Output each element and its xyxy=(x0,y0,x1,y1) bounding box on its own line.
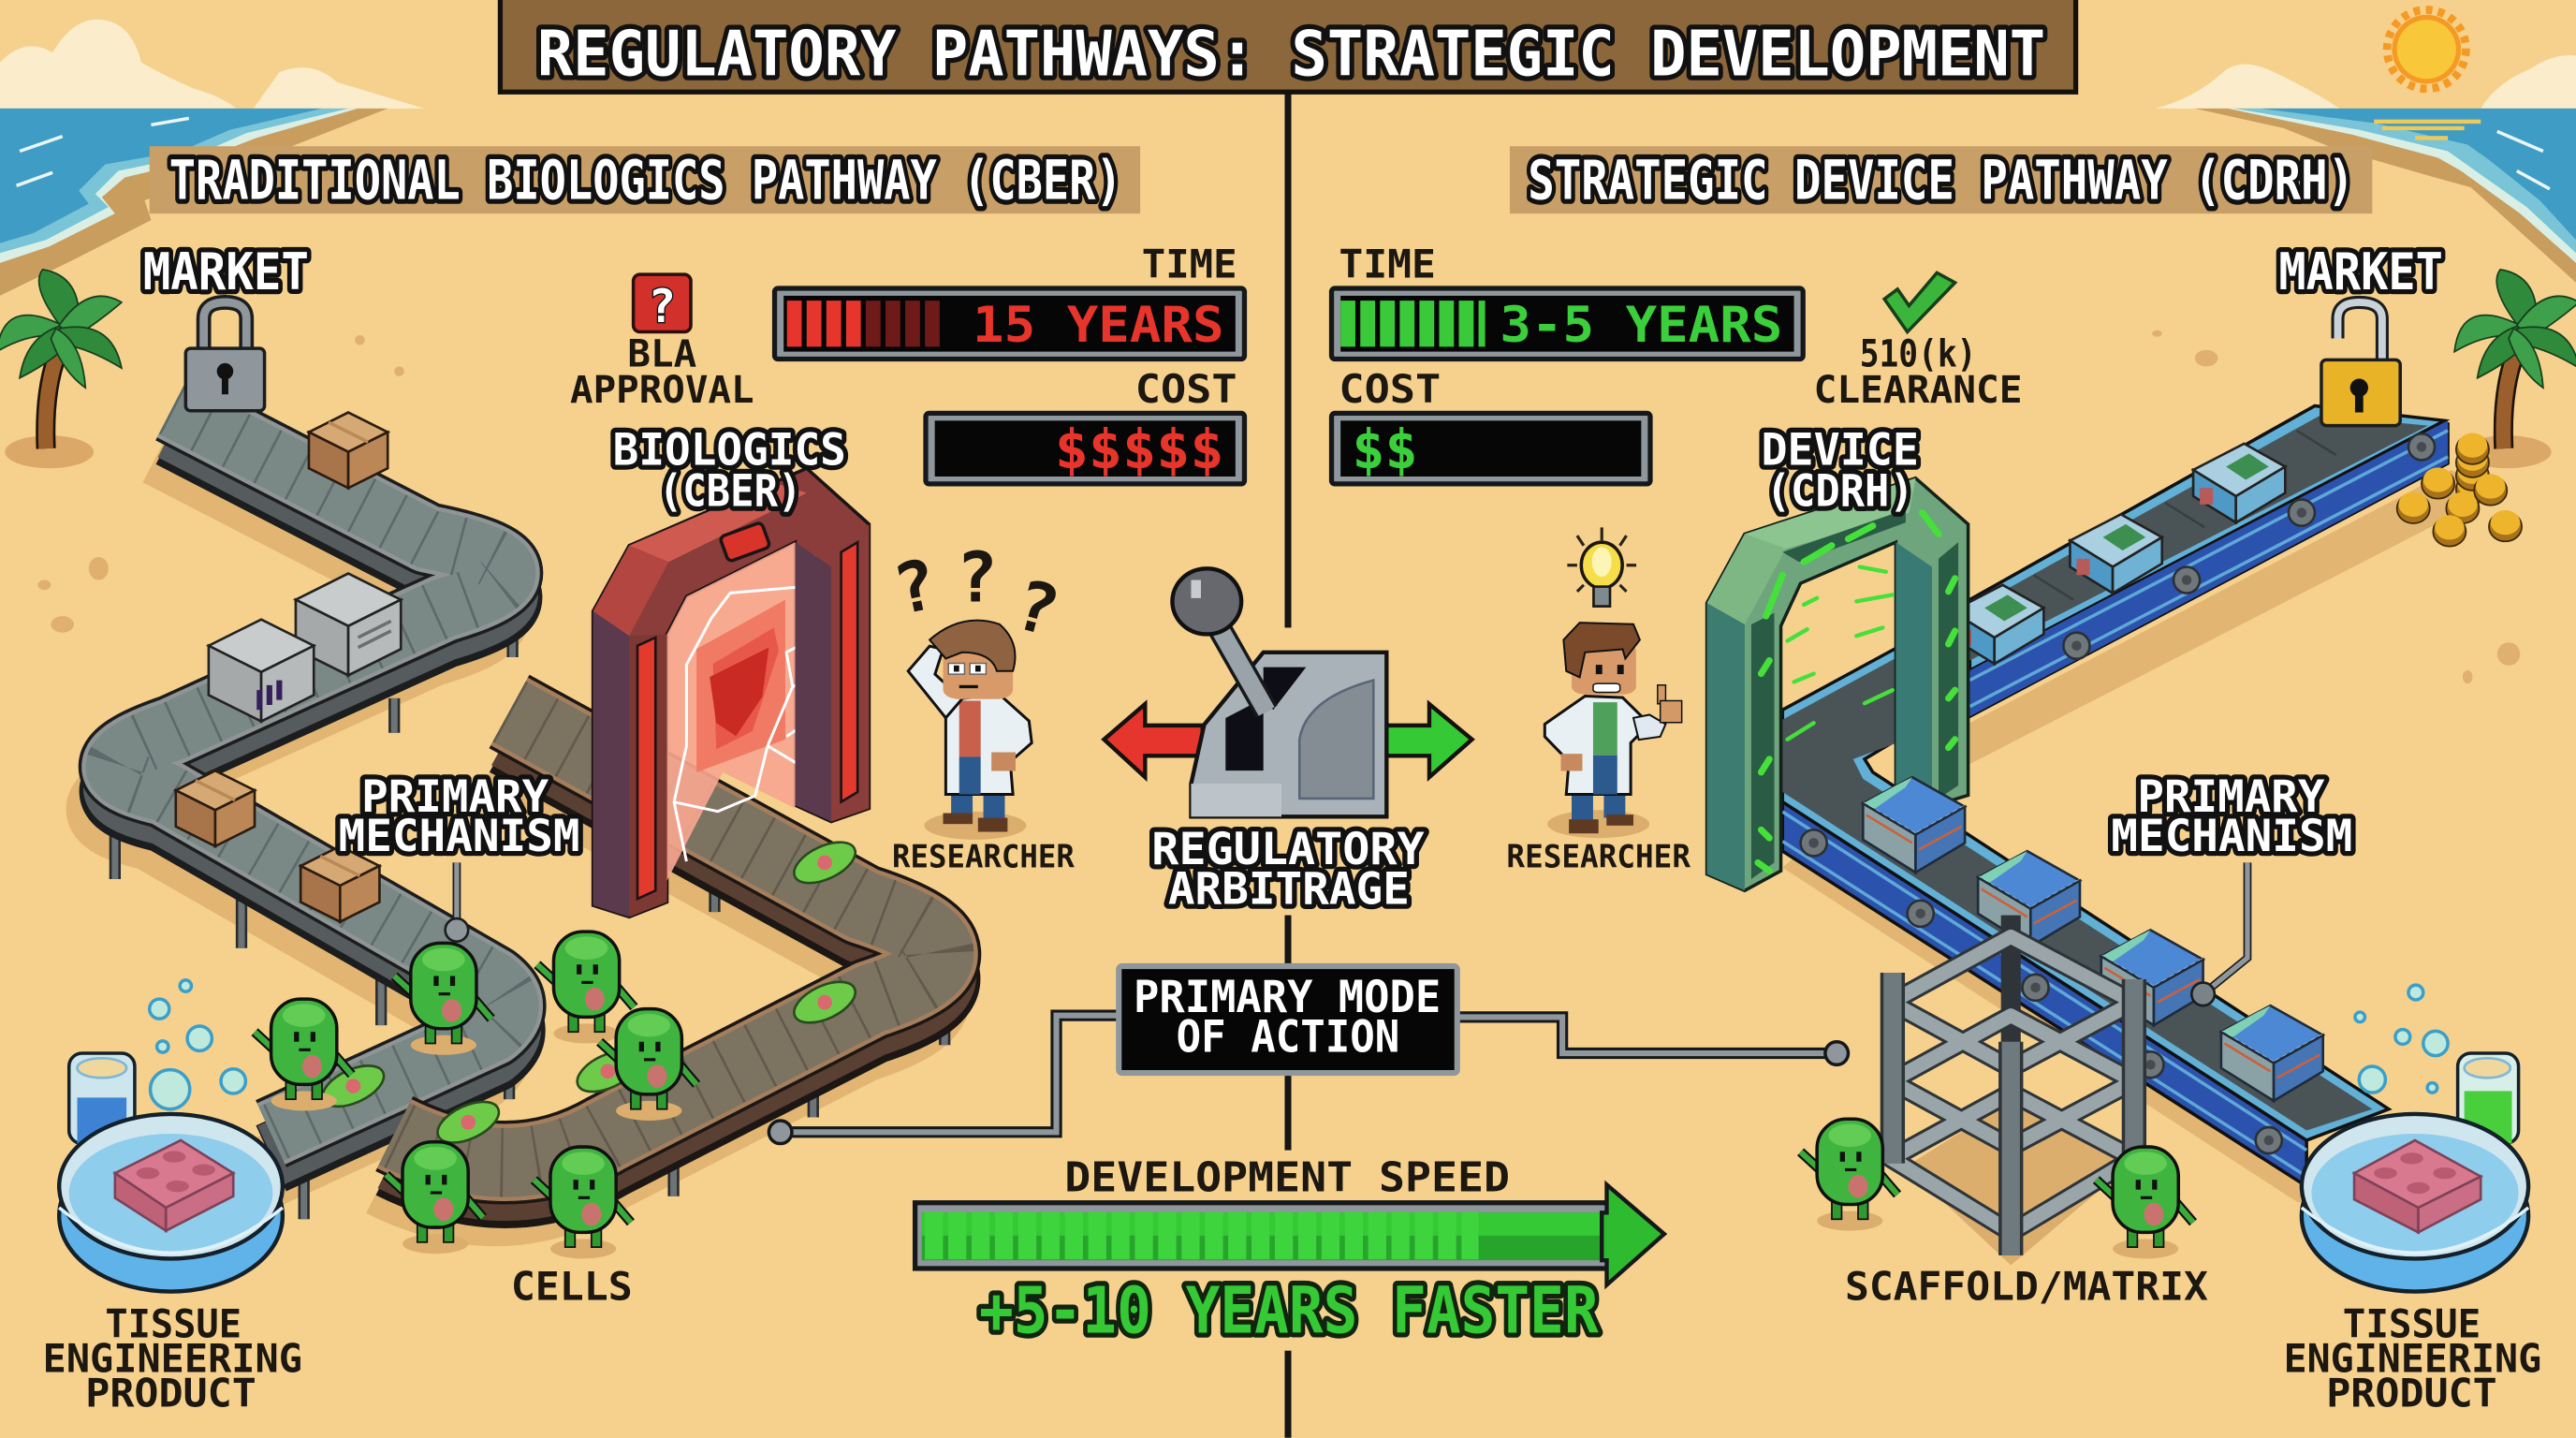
cost meter right: COST xyxy=(1339,366,1441,412)
cost meter left xyxy=(926,366,1244,484)
label: regulatory arbitrage: REGULATORY xyxy=(1151,824,1425,875)
red portal field xyxy=(667,542,817,881)
label: primary mechanism right xyxy=(2111,771,2352,862)
label: BLA approval xyxy=(570,331,754,412)
label: tissue product right xyxy=(2284,1301,2541,1416)
primary mode of action box: OF ACTION xyxy=(1177,1011,1399,1063)
label: researcher left: RESEARCHER xyxy=(892,839,1075,876)
bubbles xyxy=(150,980,245,1109)
label: tissue product right: ENGINEERING xyxy=(2284,1336,2541,1382)
label: cells: CELLS xyxy=(511,1263,633,1309)
label: primary mechanism right: MECHANISM xyxy=(2111,811,2352,862)
researcher confused xyxy=(908,621,1032,840)
belt rollers xyxy=(2063,433,2435,659)
blue conveyor belt upper xyxy=(1969,406,2497,764)
label: 510k clearance: CLEARANCE xyxy=(1814,368,2023,412)
market lock open xyxy=(2321,302,2400,426)
label: device gate xyxy=(1761,425,1919,518)
connector primary mechanism left xyxy=(446,862,468,942)
tissue block xyxy=(2354,1140,2481,1232)
primary mode of action box: PRIMARY MODE xyxy=(1134,972,1441,1023)
cells group right xyxy=(1801,1119,2193,1258)
label: tissue product left: PRODUCT xyxy=(85,1370,256,1416)
label: tissue product right: TISSUE xyxy=(2343,1301,2481,1347)
time meter left xyxy=(775,242,1244,359)
label: researcher right: RESEARCHER xyxy=(1506,839,1690,876)
icon: checkmark xyxy=(1884,272,1955,332)
label: BLA approval: BLA xyxy=(627,331,696,375)
right beach: ocean, clouds and sun xyxy=(2156,10,2576,283)
lever switch xyxy=(1104,568,1472,816)
connector mode of action left xyxy=(768,1016,1120,1144)
label: device gate: (CDRH) xyxy=(1766,466,1914,518)
callout: years faster: +5-10 YEARS FASTER xyxy=(979,1273,1599,1348)
cost meter right xyxy=(1332,366,1650,484)
question marks: ? xyxy=(1006,565,1067,653)
arrow: red left xyxy=(1104,704,1203,777)
label: tissue product left: ENGINEERING xyxy=(43,1336,302,1382)
cardboard boxes on gray belt xyxy=(176,413,388,922)
question marks: ? xyxy=(887,545,944,631)
title banner xyxy=(500,0,2076,92)
label: regulatory arbitrage xyxy=(1151,824,1425,915)
palm tree right xyxy=(2454,270,2576,468)
label: tissue product left: TISSUE xyxy=(105,1301,242,1347)
icon: BLA question block: ? xyxy=(649,279,676,333)
label: market left: MARKET xyxy=(143,242,309,301)
left beach: ocean and clouds xyxy=(0,20,424,296)
arrow: green right xyxy=(1385,704,1472,777)
question marks: ? xyxy=(956,538,998,618)
gray machine boxes xyxy=(209,574,401,721)
label: primary mechanism right: PRIMARY xyxy=(2137,771,2325,823)
label: development speed: DEVELOPMENT SPEED xyxy=(1064,1153,1510,1201)
primary mode of action box xyxy=(1119,966,1457,1073)
label: biologics gate xyxy=(613,425,846,518)
connector mode of action right xyxy=(1456,1017,1848,1064)
time meter left: TIME xyxy=(1142,242,1237,287)
heading: device pathway: STRATEGIC DEVICE PATHWAY (CDRH) xyxy=(1528,148,2354,212)
belt rollers xyxy=(1801,829,2282,1153)
brown belt legs xyxy=(674,846,944,1196)
label: primary mechanism left xyxy=(339,771,580,862)
label: BLA approval: APPROVAL xyxy=(570,368,754,412)
device boxes upper belt xyxy=(1952,444,2285,664)
device boxes lower belt xyxy=(1863,777,2323,1101)
cost meter right: $$ xyxy=(1352,418,1418,481)
cells group left xyxy=(255,932,696,1258)
connector primary mechanism right xyxy=(2191,862,2247,1005)
title text: REGULATORY PATHWAYS: STRATEGIC DEVELOPMENT xyxy=(537,18,2045,91)
tissue block xyxy=(115,1140,233,1231)
icon: sun xyxy=(2387,10,2466,89)
blue conveyor belt lower xyxy=(1782,648,2389,1203)
question marks xyxy=(887,538,1067,653)
lever housing xyxy=(1191,653,1386,816)
time meter left: 15 YEARS xyxy=(973,297,1224,354)
gray conveyor belt xyxy=(102,407,513,1219)
bubbles xyxy=(2355,985,2448,1093)
development speed arrow bar xyxy=(915,1184,1664,1284)
label: primary mechanism left: MECHANISM xyxy=(339,811,580,862)
green energy streaks xyxy=(1758,513,1955,871)
belt legs xyxy=(115,616,513,1219)
scaffold matrix xyxy=(1891,916,2134,1265)
time meter right: 3-5 YEARS xyxy=(1500,297,1782,354)
flask xyxy=(2458,1053,2519,1144)
label: 510k clearance xyxy=(1814,331,2023,412)
gold coins xyxy=(2397,433,2522,547)
tissue product dish left xyxy=(59,980,283,1292)
label: regulatory arbitrage: ARBITRAGE xyxy=(1168,863,1410,915)
tissue product dish right xyxy=(2302,985,2528,1292)
researcher happy xyxy=(1544,623,1682,838)
heading: traditional pathway: TRADITIONAL BIOLOGICS PATHWAY (CBER) xyxy=(169,148,1122,212)
label: primary mechanism left: PRIMARY xyxy=(361,771,549,823)
cost meter left: COST xyxy=(1135,366,1237,412)
label: biologics gate: (CBER) xyxy=(659,466,801,518)
biologics gate red xyxy=(593,468,869,917)
center divider xyxy=(1284,94,1292,1438)
market lock closed xyxy=(185,302,265,411)
flask xyxy=(69,1053,135,1144)
device gate green xyxy=(1707,478,1969,890)
label: tissue product right: PRODUCT xyxy=(2326,1370,2497,1416)
cost meter left: $$$$$ xyxy=(1055,418,1224,481)
lever stick xyxy=(1219,627,1266,712)
label: device gate: DEVICE xyxy=(1761,425,1919,477)
label: scaffold matrix: SCAFFOLD/MATRIX xyxy=(1845,1263,2208,1309)
cell products on brown belt xyxy=(316,834,861,1151)
icon: light bulb xyxy=(1567,527,1636,607)
label: 510k clearance: 510(k) xyxy=(1860,331,1976,375)
time meter right xyxy=(1332,242,1803,359)
brown conveyor belt xyxy=(385,712,944,1205)
label: market right: MARKET xyxy=(2278,242,2443,301)
label: tissue product left xyxy=(43,1301,302,1416)
lever knob xyxy=(1172,568,1241,634)
sand specks xyxy=(37,330,2520,683)
time meter right: TIME xyxy=(1339,242,1436,287)
label: biologics gate: BIOLOGICS xyxy=(613,425,846,477)
icon: BLA question block xyxy=(634,274,691,333)
palm tree left xyxy=(0,270,122,468)
